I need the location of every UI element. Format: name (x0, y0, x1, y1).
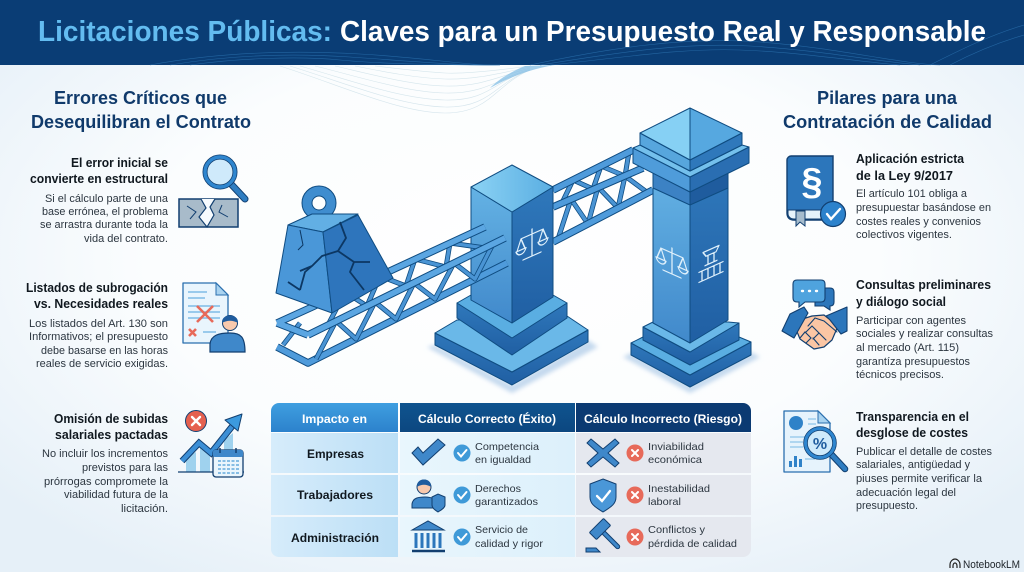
text block: transparencia: piuses permite verificar la (856, 473, 982, 485)
text block: error inicial: vida del contrato. (84, 233, 168, 245)
text block: consultas: Consultas preliminares (856, 278, 991, 292)
text block: ley 9/2017: presupuestar basándose en (856, 202, 991, 214)
text block: subrogación: Listados de subrogación (26, 281, 168, 295)
text block: subidas salariales: Omisión de subidas (54, 412, 168, 426)
text block: error inicial: El error inicial se (71, 156, 168, 170)
heading: pilares (783, 88, 992, 132)
text block: ley 9/2017: El artículo 101 obliga a (856, 188, 967, 200)
text block: consultas: y diálogo social (856, 295, 946, 309)
icon: lupa y grieta (179, 157, 245, 227)
row: administración: Administración (291, 531, 379, 545)
row: empresas: Inviabilidad (648, 441, 704, 453)
text block: ley 9/2017: Aplicación estricta (856, 152, 965, 166)
title: Claves para un Presupuesto Real y Responsable (340, 16, 986, 48)
row: empresas: en igualdad (475, 454, 531, 466)
text block: subrogación (26, 281, 168, 370)
heading: errores críticos: Desequilibran el Contrato (31, 112, 251, 132)
text block: consultas: garantíza presupuestos (856, 356, 970, 368)
text block: subrogación: Informativos; el presupuesto (29, 331, 168, 343)
text block: subidas salariales: previstos para las (82, 462, 168, 474)
text block: error inicial: convierte en estructural (30, 172, 168, 186)
row: trabajadores: laboral (648, 496, 681, 508)
icon: informe y lupa (784, 411, 845, 472)
row: administración (291, 518, 737, 555)
icon: diálogo y apretón de manos (782, 280, 847, 349)
shadow: bases (427, 340, 760, 393)
truss: tramo derecho (553, 150, 653, 242)
text block: subrogación: vs. Necesidades reales (34, 297, 168, 311)
text block: ley 9/2017 (856, 152, 991, 241)
row: administración: pérdida de calidad (648, 538, 737, 550)
text block: transparencia (856, 410, 992, 512)
text block: subidas salariales: prórrogas compromete la (44, 476, 168, 488)
text block: error inicial: base errónea, el problema (42, 206, 168, 218)
table header: Impacto en (302, 412, 367, 426)
row: administración: calidad y rigor (475, 538, 544, 550)
weight: pesa agrietada (276, 191, 393, 313)
truss: tramo izquierdo (277, 227, 507, 363)
decorative waves (280, 65, 555, 113)
footer: NotebookLM: NotebookLM (963, 559, 1020, 571)
row: empresas: Competencia (475, 441, 539, 453)
illustration: estructura central (276, 108, 760, 393)
text block: subidas salariales: viabilidad futura de la (64, 489, 168, 501)
text block: transparencia: presupuesto. (856, 500, 918, 512)
table header: Cálculo Incorrecto (Riesgo) (584, 412, 742, 426)
row: administración: Conflictos y (648, 524, 706, 536)
text block: subidas salariales: salariales pactadas (55, 428, 168, 442)
text block: subrogación: Los listados del Art. 130 son (29, 318, 168, 330)
icon: templo pilar derecho (699, 244, 723, 282)
row: administración: Servicio de (475, 524, 528, 536)
text block: consultas: sociales y realizar consultas (856, 328, 993, 340)
heading: errores críticos: Errores Críticos que (54, 88, 227, 108)
text block: transparencia: Transparencia en el (856, 410, 969, 424)
text block: ley 9/2017: colectivos vigentes. (856, 229, 952, 241)
table header (302, 412, 742, 426)
row: empresas: económica (648, 454, 702, 466)
text block: transparencia: desglose de costes (856, 426, 968, 440)
row: trabajadores: Inestabilidad (648, 483, 710, 495)
icon: balanza pilar derecho (656, 241, 688, 281)
icon: informe y lupa: % (813, 436, 827, 453)
title band (0, 0, 1024, 65)
row: trabajadores: garantizados (475, 496, 538, 508)
icon: libro de ley: § (801, 161, 823, 203)
text block: transparencia: adecuación legal del (856, 487, 956, 499)
row: trabajadores (297, 479, 710, 512)
text block: subidas salariales (42, 412, 168, 515)
row: empresas (307, 439, 704, 467)
heading: pilares: Pilares para una (817, 88, 958, 108)
text block: error inicial (30, 156, 168, 245)
table header: Cálculo Correcto (Éxito) (418, 411, 556, 426)
text block: transparencia: salariales, antigüedad y (856, 459, 971, 471)
icon: documento y trabajador (183, 283, 245, 352)
pillar: izquierdo (435, 165, 588, 385)
icon: libro de ley (787, 156, 846, 226)
text block: ley 9/2017: costes reales y convenios (856, 216, 981, 228)
row: empresas: Empresas (307, 447, 364, 461)
text block: transparencia: Publicar el detalle de costes (856, 446, 992, 458)
text block: error inicial: se arrastra durante toda la (40, 219, 168, 231)
text block: subidas salariales: licitación. (121, 503, 168, 515)
text block: consultas (856, 278, 993, 381)
heading: errores críticos (31, 88, 251, 132)
text block: error inicial: Si el cálculo parte de una (45, 193, 168, 205)
text block: subidas salariales: No incluir los incrementos (42, 448, 168, 460)
row: trabajadores: Derechos (475, 483, 521, 495)
icon: balanza pilar izquierdo (516, 222, 548, 263)
icon: gráfica salarial (178, 410, 244, 477)
text block: ley 9/2017: de la Ley 9/2017 (856, 169, 953, 183)
text block: subrogación: reales de servicio exigidas. (36, 358, 168, 370)
table: impacto (271, 403, 751, 557)
title: Licitaciones Públicas: (38, 16, 332, 48)
heading: pilares: Contratación de Calidad (783, 112, 992, 132)
text block: consultas: Participar con agentes (856, 315, 966, 327)
text block: consultas: al mercado (Art. 115) (856, 342, 959, 354)
pillar: derecho (631, 108, 751, 387)
text block: subrogación: debe basarse en las horas (41, 345, 168, 357)
row: trabajadores: Trabajadores (297, 488, 373, 502)
text block: consultas: técnicos precisos. (856, 369, 944, 381)
